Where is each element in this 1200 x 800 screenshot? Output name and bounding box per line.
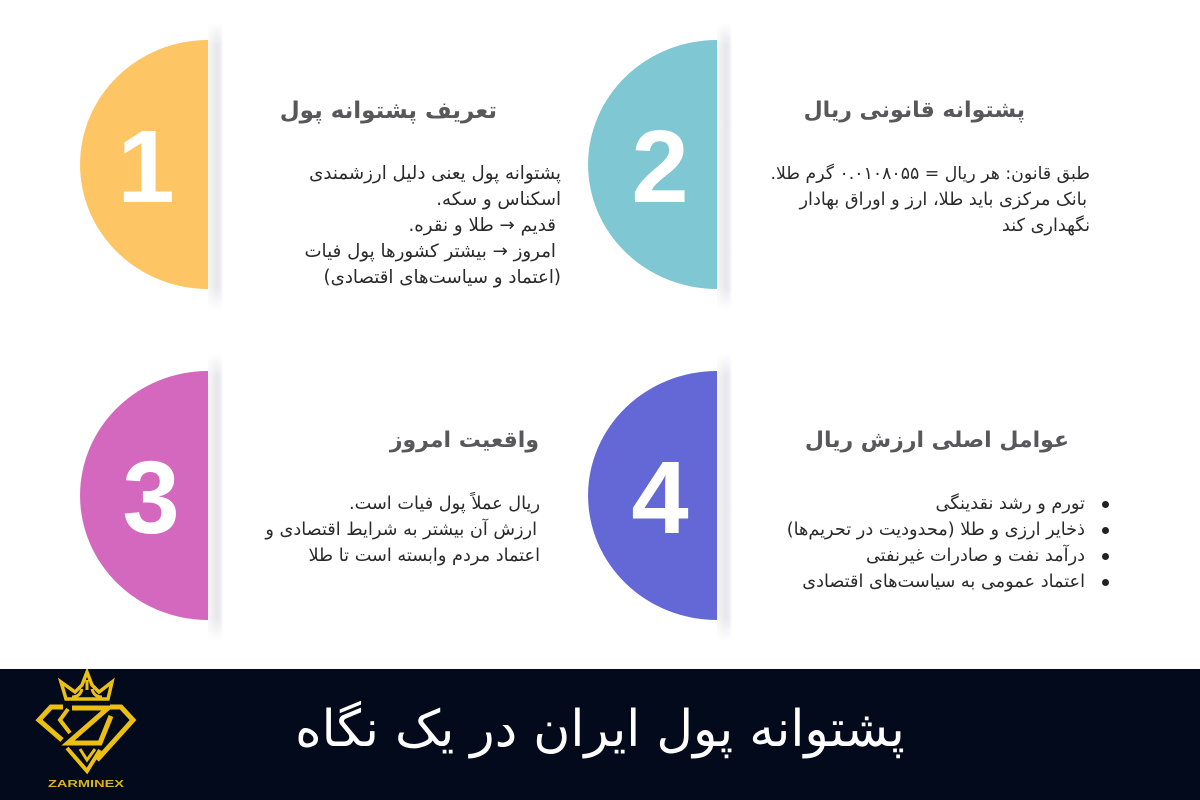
heading 4: عوامل اصلی ارزش ریال: [805, 428, 1069, 453]
bullet list: تورم و رشد نقدینگی: [935, 494, 1085, 514]
bullet list: ذخایر ارزی و طلا (محدودیت در تحریم‌ها): [787, 520, 1085, 540]
body text 1: اسکناس و سکه.: [436, 189, 561, 210]
logo: Zarminex crown and diamond: [36, 669, 136, 790]
body text 1: امروز → بیشتر کشورها پول فیات: [304, 241, 556, 262]
heading 3: واقعیت امروز: [390, 428, 539, 453]
logo wordmark: ZARMINEX: [48, 779, 124, 790]
body text 1: قدیم → طلا و نقره.: [408, 215, 556, 236]
semicircle 3: [80, 371, 208, 620]
semicircle 4: [588, 371, 717, 620]
body text 1: پشتوانه پول یعنی دلیل ارزشمندی: [309, 163, 561, 184]
semicircle 2: [588, 40, 717, 289]
bullet list: اعتماد عمومی به سیاست‌های اقتصادی: [802, 572, 1085, 592]
body text 3: اعتماد مردم وابسته است تا طلا: [308, 546, 540, 566]
body text 2: [770, 164, 1090, 236]
panel: card 1 definition: [80, 30, 561, 302]
body text 3: ریال عملاً پول فیات است.: [349, 494, 540, 514]
bullet list: درآمد نفت و صادرات غیرنفتی: [866, 546, 1085, 566]
number 3: 3: [122, 440, 180, 555]
footer title: پشتوانه پول ایران در یک نگاه: [295, 699, 905, 758]
panel: card 4 main factors: [588, 362, 1109, 632]
semicircle 1: [80, 40, 208, 289]
body text 2: نگهداری کند: [1002, 216, 1090, 236]
number 4: 4: [631, 440, 689, 555]
heading 1: تعریف پشتوانه پول: [280, 98, 497, 124]
body text 2: بانک مرکزی باید طلا، ارز و اوراق بهادار: [799, 190, 1087, 210]
heading 2: پشتوانه قانونی ریال: [804, 98, 1025, 123]
number 1: 1: [117, 109, 175, 224]
footer bar: [0, 669, 1200, 800]
bullet list: [787, 493, 1109, 592]
body text 2: طبق قانون: هر ریال = ۰.۰۱۰۸۰۵۵ گرم طلا.: [770, 164, 1090, 184]
number 2: 2: [631, 109, 689, 224]
panel: card 2 legal backing: [588, 30, 1090, 302]
body text 1: (اعتماد و سیاست‌های اقتصادی): [324, 267, 561, 288]
body text 3: ارزش آن بیشتر به شرایط اقتصادی و: [265, 520, 537, 540]
panel: card 3 today's reality: [80, 362, 540, 632]
body text 1: [304, 163, 561, 288]
body text 3: [264, 492, 540, 566]
